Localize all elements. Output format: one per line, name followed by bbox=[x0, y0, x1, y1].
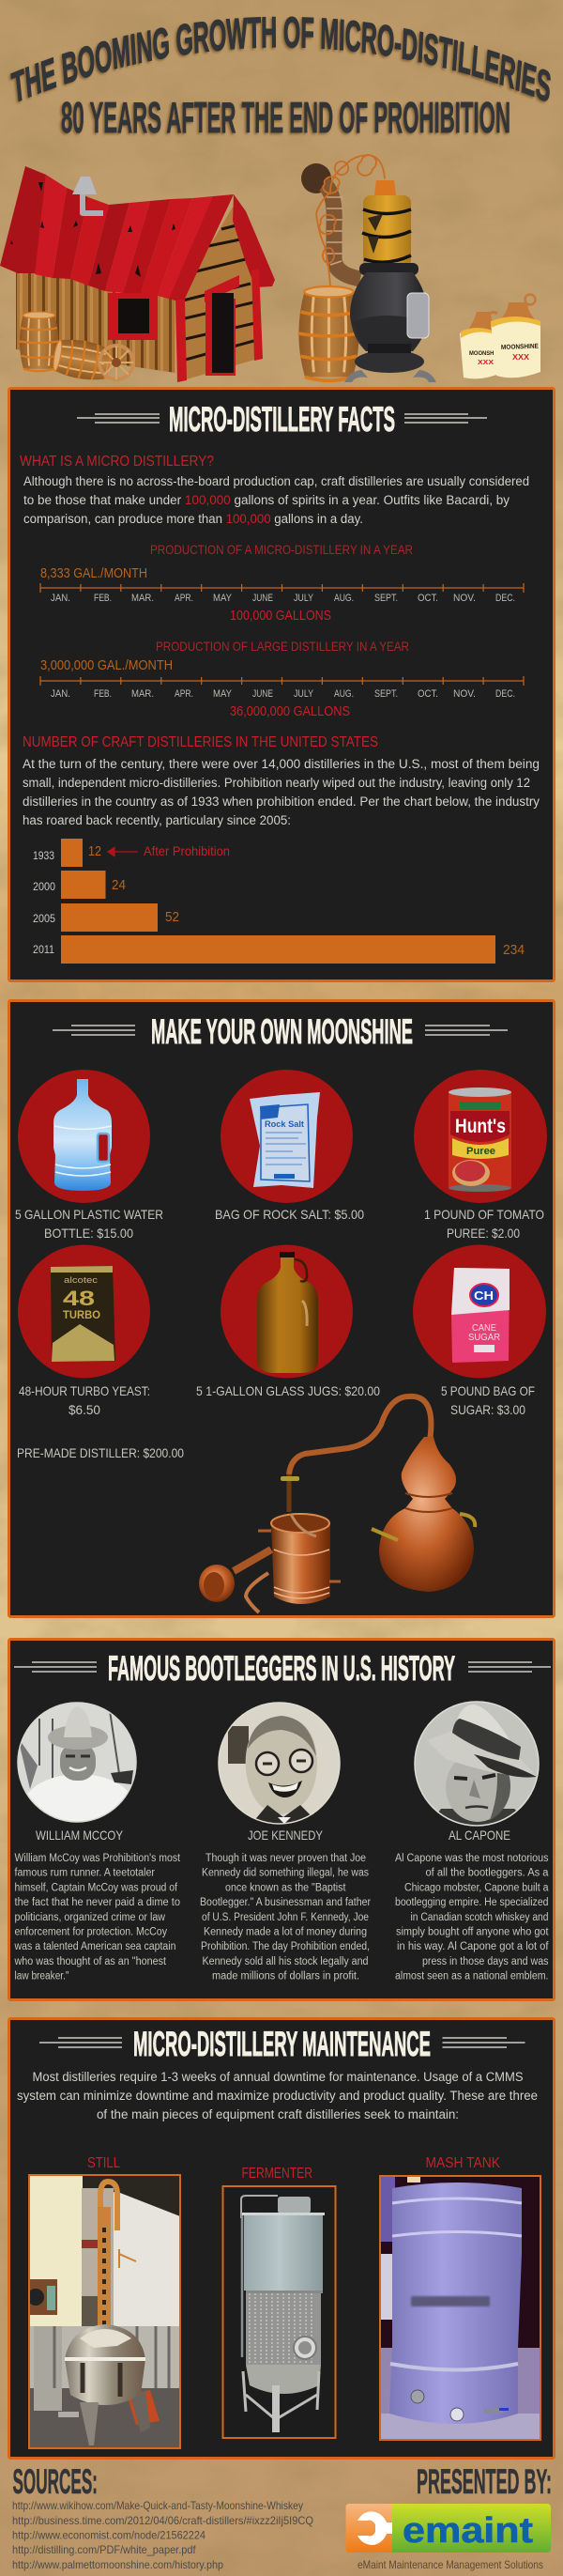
bar chart: distilleries by year: 12 bbox=[88, 843, 101, 859]
timeline chart: micro-distillery production: JULY bbox=[294, 593, 314, 604]
item: sugar bag: SUGAR: $3.00 bbox=[450, 1402, 525, 1417]
item: turbo yeast: 48-HOUR TURBO YEAST: bbox=[19, 1383, 150, 1398]
barrels and wheel bbox=[19, 312, 133, 384]
equipment: mash tank bbox=[380, 2155, 540, 2440]
portrait: William McCoy bbox=[14, 1700, 181, 1982]
swan neck pipe bbox=[289, 1396, 431, 1474]
timeline chart: large distillery production: NOV. bbox=[453, 688, 476, 700]
paragraph: maintenance intro: of the main pieces of equipment craft distilleries seek to maintain: bbox=[97, 2107, 459, 2121]
item: water bottle: BOTTLE: $15.00 bbox=[44, 1226, 133, 1241]
source links: http://distilling.com/PDF/white_paper.pdf bbox=[12, 2543, 196, 2556]
bar chart: distilleries by year: 52 bbox=[165, 909, 179, 925]
bar chart: distilleries by year: 2005 bbox=[33, 912, 55, 925]
paragraph: history: has roared back recently, particulary since 2005: bbox=[23, 813, 291, 827]
heading bbox=[77, 400, 487, 439]
small jug bbox=[460, 312, 499, 378]
bio: in his way. Al Capone got a lot of bbox=[397, 1941, 549, 1952]
timeline chart: micro-distillery production: APR. bbox=[175, 593, 193, 604]
bio: William McCoy was Prohibition's most bbox=[15, 1853, 181, 1864]
item: water bottle bbox=[15, 1070, 163, 1241]
timeline chart: large distillery production: OCT. bbox=[418, 688, 438, 700]
bar chart: distilleries by year: 2000 bbox=[33, 880, 55, 893]
item: turbo yeast bbox=[18, 1245, 150, 1417]
paragraph: history: At the turn of the century, there were over 14,000 distilleries in the U.S., most of them being bbox=[23, 757, 540, 771]
item: water bottle: 5 GALLON PLASTIC WATER bbox=[15, 1207, 163, 1222]
timeline chart: micro-distillery production: DEC. bbox=[495, 593, 515, 604]
name: AL CAPONE bbox=[449, 1828, 510, 1843]
panel: make your own moonshine bbox=[9, 1001, 554, 1617]
item: tomato puree: Hunt's bbox=[455, 1116, 506, 1137]
bio: simply bought off anyone who got bbox=[396, 1927, 549, 1938]
bar chart: distilleries by year bbox=[33, 839, 525, 964]
collar and spout bbox=[287, 1474, 291, 1512]
label: pre-made distiller: PRE-MADE DISTILLER: $200.00 bbox=[17, 1445, 184, 1460]
timeline chart: large distillery production: APR. bbox=[175, 688, 193, 700]
source links bbox=[12, 2499, 313, 2571]
item: tomato puree: 1 POUND OF TOMATO bbox=[424, 1207, 544, 1222]
bio: Kennedy did something illegal, he was bbox=[202, 1868, 369, 1879]
timeline chart: micro-distillery production: OCT. bbox=[418, 593, 438, 604]
small jug: MOONSHI bbox=[469, 350, 495, 357]
paragraph: history: small, independent micro-distilleries. Prohibition nearly wiped out the industry, leaving only 12 bbox=[23, 776, 530, 790]
equipment: still: STILL bbox=[87, 2155, 120, 2171]
annotation: After Prohibition bbox=[144, 843, 230, 858]
timeline chart: large distillery production: JULY bbox=[294, 688, 314, 700]
timeline chart: micro-distillery production: FEB. bbox=[94, 593, 112, 604]
wall vent and hose bbox=[301, 163, 360, 279]
bio: Al Capone was the most notorious bbox=[395, 1853, 549, 1864]
equipment: fermenter: FERMENTER bbox=[242, 2166, 312, 2182]
item: rock salt: BAG OF ROCK SALT: $5.00 bbox=[215, 1207, 364, 1222]
bar chart: distilleries by year: 2011 bbox=[33, 943, 54, 956]
paragraph: history bbox=[23, 757, 540, 827]
bio: Bootlegger." A businessman and father bbox=[200, 1897, 371, 1908]
bio: Though it was never proven that Joe bbox=[205, 1853, 366, 1864]
portrait: Joe Kennedy bbox=[200, 1700, 371, 1982]
bio: of all the bootleggers. As a bbox=[426, 1868, 549, 1879]
photo: mash tank bbox=[380, 2176, 540, 2440]
item: sugar bag: CH bbox=[474, 1288, 494, 1303]
item: rock salt bbox=[215, 1070, 364, 1222]
arrow: after prohibition bbox=[108, 847, 138, 856]
item: tomato puree: Puree bbox=[466, 1146, 495, 1157]
item: glass jug bbox=[196, 1245, 380, 1398]
logo: eMaint: emaint bbox=[403, 2511, 533, 2551]
paragraph: maintenance intro: system can minimize downtime and maximize productivity and product quality. These are three bbox=[17, 2089, 538, 2103]
bar chart: distilleries by year: 24 bbox=[112, 877, 126, 893]
timeline chart: large distillery production: FEB. bbox=[94, 688, 112, 700]
paragraph: definition bbox=[23, 474, 529, 526]
bio: was a talented American sea captain bbox=[14, 1941, 176, 1952]
heading bbox=[53, 1012, 508, 1051]
equipment: mash tank: MASH TANK bbox=[426, 2155, 501, 2171]
shack side wall bbox=[16, 268, 175, 373]
timeline chart: micro-distillery production: AUG. bbox=[334, 593, 354, 604]
title line 1: THE BOOMING GROWTH OF MICRO-DISTILLERIES bbox=[8, 17, 551, 104]
photo: still bbox=[27, 2175, 180, 2448]
bio: who was thought of as an "honest bbox=[14, 1956, 167, 1967]
funnel bbox=[234, 1550, 271, 1571]
bar chart: distilleries by year: 234 bbox=[503, 942, 525, 958]
bio: made millions of dollars in profit. bbox=[212, 1971, 359, 1982]
timeline chart: micro-distillery production: JUNE bbox=[252, 593, 273, 604]
bio: Kennedy made a lot of money during bbox=[204, 1927, 367, 1938]
timeline chart: large distillery production: SEPT. bbox=[374, 688, 398, 700]
source links: http://www.palmettomoonshine.com/history.php bbox=[12, 2558, 223, 2571]
bio: of U.S. President John F. Kennedy, Joe bbox=[202, 1912, 369, 1923]
paragraph: definition: comparison, can produce more than 100,000 gallons in a day. bbox=[23, 512, 363, 526]
item: turbo yeast: $6.50 bbox=[68, 1402, 100, 1417]
large jug: XXX bbox=[512, 353, 530, 362]
shack window bbox=[108, 293, 158, 340]
panel: micro-distillery facts bbox=[9, 389, 554, 980]
source links: http://business.time.com/2012/04/06/craft-distillers/#ixzz2iIj5I9CQ bbox=[12, 2514, 313, 2527]
timeline chart: large distillery production: DEC. bbox=[495, 688, 515, 700]
sources: SOURCES: bbox=[13, 2462, 98, 2501]
illustration: copper alembic still bbox=[199, 1396, 475, 1612]
panel: famous bootleggers bbox=[9, 1640, 554, 2000]
bio: Kennedy sold all his stock legally and bbox=[203, 1956, 368, 1967]
bio: press in those days and was bbox=[422, 1956, 549, 1967]
small jug: XXX bbox=[478, 360, 494, 366]
pot bbox=[379, 1437, 474, 1592]
paragraph: maintenance intro bbox=[17, 2070, 538, 2121]
timeline chart: micro-distillery production: PRODUCTION OF A MICRO-DISTILLERY IN A YEAR bbox=[150, 542, 413, 557]
timeline chart: micro-distillery production: MAR. bbox=[131, 593, 154, 604]
sources bbox=[12, 2462, 313, 2571]
large jug bbox=[491, 295, 540, 378]
item: turbo yeast: alcotec bbox=[64, 1275, 99, 1285]
presented by bbox=[345, 2462, 552, 2571]
source links: http://www.wikihow.com/Make-Quick-and-Tasty-Moonshine-Whiskey bbox=[12, 2499, 303, 2512]
bar chart: distilleries by year: 1933 bbox=[33, 849, 54, 862]
bio bbox=[200, 1853, 371, 1982]
timeline chart: large distillery production: MAY bbox=[213, 688, 233, 700]
item: sugar bag: 5 POUND BAG OF bbox=[441, 1383, 535, 1398]
item: sugar bag: CANE bbox=[472, 1323, 496, 1334]
bio: himself, Captain McCoy was proud of bbox=[15, 1882, 178, 1893]
panel: micro-distillery maintenance bbox=[9, 2019, 554, 2459]
timeline chart: micro-distillery production: SEPT. bbox=[374, 593, 398, 604]
timeline chart: large distillery production: PRODUCTION OF LARGE DISTILLERY IN A YEAR bbox=[156, 639, 409, 654]
black stove bbox=[344, 263, 436, 382]
item: sugar bag: SUGAR bbox=[468, 1333, 500, 1343]
paragraph: definition: to be those that make under 100,000 gallons of spirits in a year. Outfits like Bacardi, by bbox=[23, 493, 510, 507]
equipment: fermenter bbox=[223, 2166, 336, 2438]
illustration: moonshine jugs bbox=[460, 295, 540, 378]
shack roof bbox=[0, 166, 275, 302]
timeline chart: large distillery production bbox=[40, 639, 524, 719]
timeline chart: large distillery production: JUNE bbox=[252, 688, 273, 700]
bio: politicians, organized crime or law bbox=[15, 1912, 166, 1923]
photo: fermenter bbox=[223, 2186, 336, 2438]
timeline chart: micro-distillery production: MAY bbox=[213, 593, 233, 604]
name: JOE KENNEDY bbox=[248, 1828, 324, 1843]
logo: eMaint bbox=[345, 2504, 551, 2553]
copper coil bbox=[316, 155, 385, 291]
timeline chart: large distillery production: JAN. bbox=[51, 688, 70, 700]
illustration: moonshine shack bbox=[0, 166, 275, 384]
timeline chart: micro-distillery production: 8,333 GAL./MONTH bbox=[40, 565, 147, 581]
bio: almost seen as a national emblem. bbox=[395, 1971, 548, 1982]
illustration: pot still and barrel bbox=[298, 155, 436, 382]
source links: http://www.economist.com/node/21562224 bbox=[12, 2528, 205, 2541]
bio: in Canadian scotch whiskey and bbox=[411, 1912, 548, 1923]
bio: famous rum runner. A teetotaler bbox=[15, 1868, 155, 1879]
bio: bootlegging empire. He specialized bbox=[395, 1897, 548, 1908]
chimney bbox=[72, 177, 103, 213]
large jug: MOONSHINE bbox=[501, 344, 539, 351]
item: turbo yeast: 48 bbox=[63, 1287, 95, 1310]
timeline chart: large distillery production: 36,000,000 GALLONS bbox=[230, 704, 350, 719]
paragraph: history: distilleries in the country as of 1933 when prohibition ended. Per the chart below, the industry bbox=[23, 794, 540, 809]
bio: the fact that he never paid a dime to bbox=[15, 1897, 180, 1908]
timeline chart: micro-distillery production: NOV. bbox=[453, 593, 476, 604]
item: sugar bag bbox=[413, 1245, 546, 1417]
timeline chart: micro-distillery production: 100,000 GALLONS bbox=[230, 609, 331, 624]
bio: enforcement for protection. McCoy bbox=[15, 1927, 167, 1938]
timeline chart: large distillery production: MAR. bbox=[131, 688, 154, 700]
timeline chart: micro-distillery production: JAN. bbox=[51, 593, 70, 604]
shack door bbox=[175, 269, 263, 382]
bio bbox=[395, 1853, 549, 1982]
title bbox=[8, 17, 551, 142]
bio: Prohibition. The day Prohibition ended, bbox=[201, 1941, 370, 1952]
subheading: what is a micro distillery: WHAT IS A MICRO DISTILLERY? bbox=[20, 454, 214, 470]
portrait: Al Capone bbox=[395, 1700, 549, 1982]
item: tomato puree bbox=[414, 1070, 547, 1241]
standing barrel bbox=[298, 286, 359, 380]
item: rock salt: Rock Salt bbox=[265, 1119, 304, 1129]
subheading: number of craft distilleries: NUMBER OF CRAFT DISTILLERIES IN THE UNITED STATES bbox=[23, 734, 378, 750]
item: tomato puree: PUREE: $2.00 bbox=[447, 1226, 520, 1241]
item: turbo yeast: TURBO bbox=[63, 1308, 100, 1321]
bio: once known as the "Baptist bbox=[225, 1882, 346, 1893]
shack gable wall bbox=[178, 207, 258, 380]
bio bbox=[14, 1853, 181, 1982]
bio: Chicago mobster, Capone built a bbox=[404, 1882, 549, 1893]
name: WILLIAM MCCOY bbox=[36, 1828, 124, 1843]
timeline chart: large distillery production: 3,000,000 GAL./MONTH bbox=[40, 657, 173, 673]
gold boiler bbox=[362, 180, 411, 268]
paragraph: definition: Although there is no across-the-board production cap, craft distilleries are usually considered bbox=[23, 474, 529, 488]
timeline chart: micro-distillery production bbox=[40, 542, 524, 624]
timeline chart: large distillery production: AUG. bbox=[334, 688, 354, 700]
item: glass jug: 5 1-GALLON GLASS JUGS: $20.00 bbox=[196, 1383, 380, 1398]
paragraph: maintenance intro: Most distilleries require 1-3 weeks of annual downtime for maintenance. Usage of a CMMS bbox=[32, 2070, 524, 2084]
condenser bbox=[271, 1517, 330, 1604]
equipment: still bbox=[27, 2155, 180, 2448]
bio: law breaker." bbox=[15, 1971, 69, 1982]
